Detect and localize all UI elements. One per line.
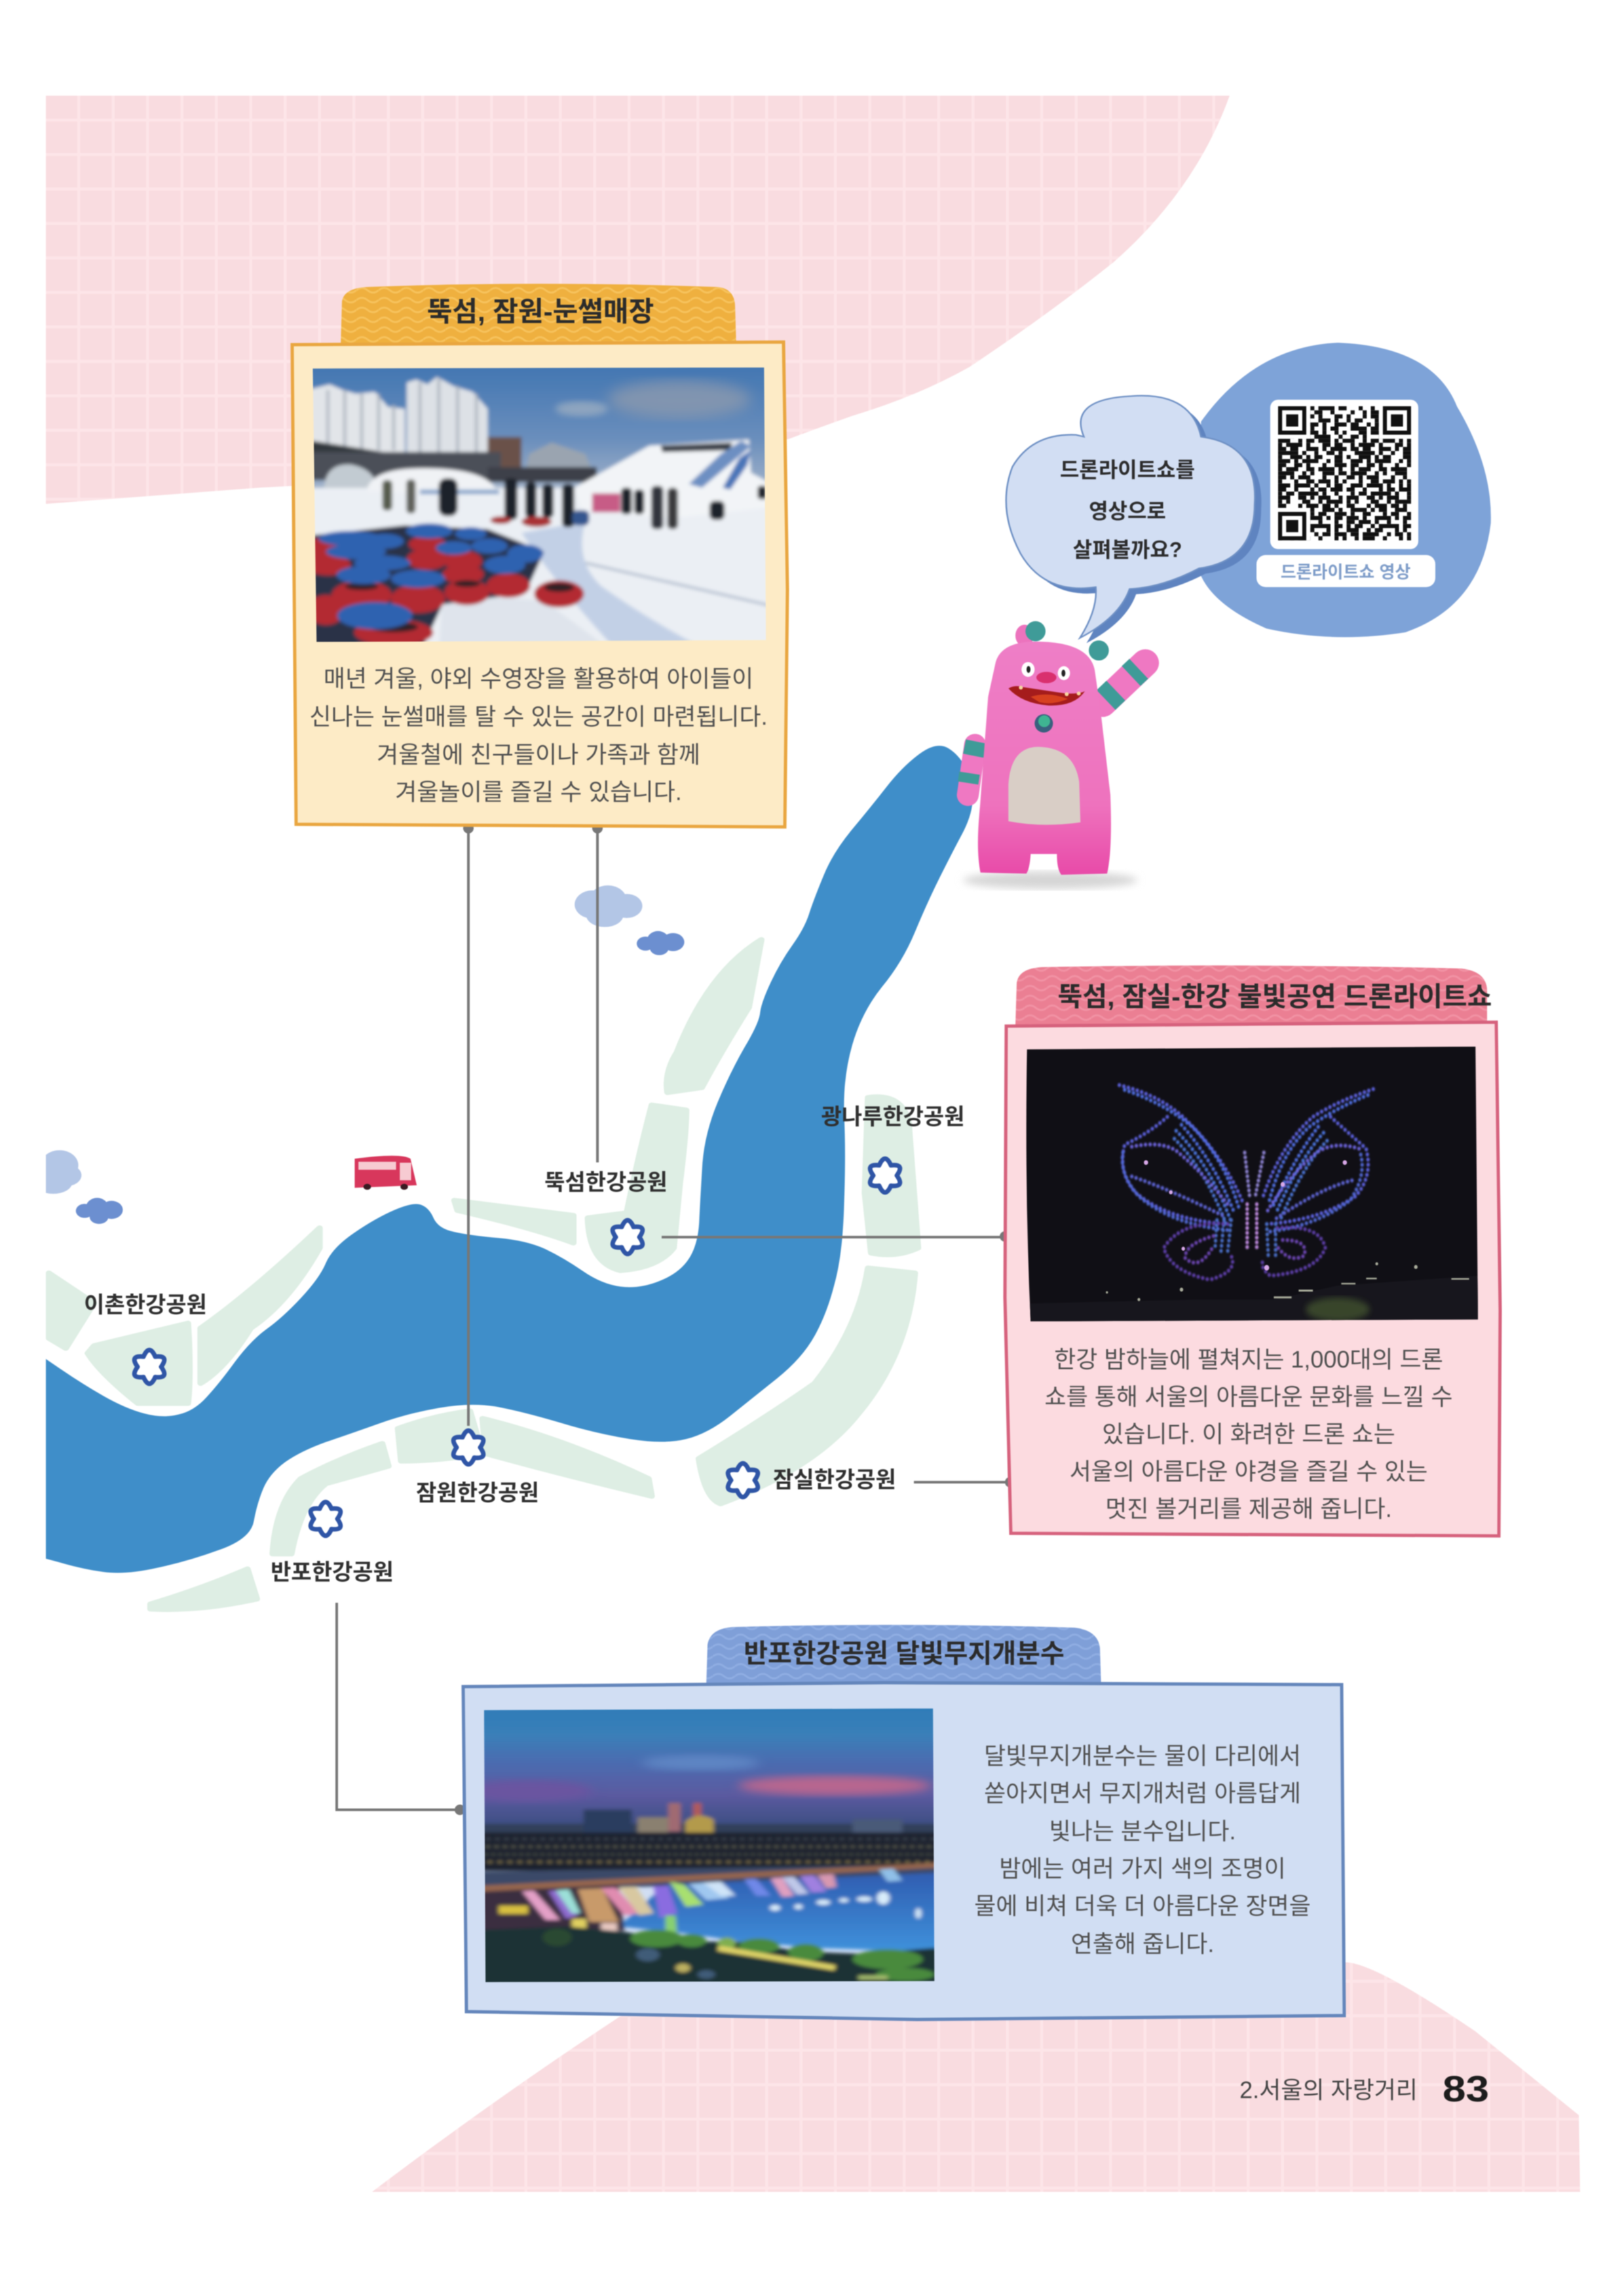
water — [618, 1872, 958, 1953]
bridge — [461, 1862, 958, 1893]
panel box — [292, 342, 787, 827]
text block — [309, 665, 768, 805]
text block: 겨울철에 친구들이나 가족과 함께 — [377, 741, 700, 768]
right arm — [1103, 663, 1145, 703]
panel box — [463, 1683, 1344, 2019]
button — [1034, 714, 1053, 733]
text block: 매년 겨울, 야외 수영장을 활용하여 아이들이 — [324, 665, 753, 692]
connector lines — [337, 828, 1010, 1810]
map: Han river with parks — [35, 746, 973, 1609]
icon: bus — [354, 1156, 417, 1190]
belly — [1008, 747, 1080, 825]
photo: butterfly drones — [1022, 1043, 1483, 1326]
tab — [1015, 965, 1487, 1025]
footer: page number: 83 — [1443, 2068, 1489, 2109]
heading: 뚝섬, 잠실-한강 불빛공연 드론라이트쇼 — [1058, 982, 1492, 1012]
map labels: park names: 뚝섬한강공원 — [544, 1170, 668, 1195]
photo: rainbow bridge at dusk — [461, 1695, 958, 1997]
slide — [574, 436, 765, 491]
heading: 뚝섬, 잠원-눈썰매장 — [427, 296, 654, 327]
text block: 달빛무지개분수는 물이 다리에서 — [984, 1742, 1301, 1769]
speech bubble: 살펴볼까요? — [1073, 538, 1182, 562]
butterfly — [1120, 1085, 1373, 1280]
map labels: park names: 이촌한강공원 — [84, 1293, 207, 1318]
map labels: park names: 광나루한강공원 — [821, 1105, 964, 1130]
text block: 연출해 줍니다. — [1071, 1930, 1214, 1957]
map labels: park names — [84, 1105, 964, 1585]
body — [978, 641, 1111, 875]
speech bubble: 영상으로 — [1089, 499, 1166, 523]
text block: 밤에는 여러 가지 색의 조명이 — [999, 1855, 1286, 1882]
ears — [1015, 624, 1034, 647]
text block — [974, 1742, 1311, 1957]
water glints — [770, 1892, 921, 1919]
map markers: park flowers — [134, 1158, 900, 1536]
tube pile — [314, 523, 542, 643]
map labels: park names: 잠원한강공원 — [416, 1481, 539, 1506]
city lights — [1029, 1276, 1478, 1322]
heading: 반포한강공원 달빛무지개분수 — [744, 1639, 1065, 1668]
shadow on snow — [521, 522, 690, 641]
blue blob behind QR code — [1201, 343, 1491, 637]
mascot: pink monster — [963, 621, 1145, 889]
panel: drone light show — [1005, 965, 1500, 1536]
text block: 신나는 눈썰매를 탈 수 있는 공간이 마련됩니다. — [309, 703, 768, 730]
background: bottom pink grid shape — [372, 1962, 1580, 2192]
text block — [1044, 1346, 1453, 1522]
text block: 겨울놀이를 즐길 수 있습니다. — [395, 778, 682, 805]
map labels: park names: 반포한강공원 — [271, 1560, 394, 1585]
text block: 물에 비쳐 더욱 더 아름다운 장면을 — [974, 1892, 1311, 1919]
clouds — [35, 885, 643, 1194]
speech bubble: 드론라이트쇼를 — [1060, 458, 1195, 482]
tab — [706, 1625, 1101, 1687]
people — [383, 478, 767, 529]
text block: 한강 밤하늘에 펼쳐지는 1,000대의 드론 — [1054, 1346, 1443, 1373]
face — [1021, 662, 1034, 677]
text block: 서울의 아름다운 야경을 즐길 수 있는 — [1070, 1458, 1427, 1485]
text block: 쏟아지면서 무지개처럼 아름답게 — [984, 1780, 1301, 1807]
panel: snow sledding — [292, 284, 787, 827]
left bank under bridge — [461, 1885, 624, 1935]
panel: moonlight rainbow fountain — [461, 1625, 1344, 2019]
map labels: park names: 잠실한강공원 — [773, 1468, 896, 1493]
far water — [461, 1864, 958, 1892]
foreground — [499, 1905, 528, 1914]
fountain colours — [522, 1869, 902, 1922]
panel box — [1005, 1022, 1500, 1536]
QR caption pill: 드론라이트쇼 영상 — [1281, 562, 1410, 582]
text block: 있습니다. 이 화려한 드론 쇼는 — [1102, 1421, 1395, 1447]
text block: 쇼를 통해 서울의 아름다운 문화를 느낄 수 — [1044, 1383, 1453, 1410]
QR caption pill — [1256, 555, 1435, 587]
text block: 빛나는 분수입니다. — [1049, 1818, 1236, 1845]
tab — [341, 284, 736, 347]
park strips — [49, 940, 918, 1609]
background: top pink grid shape — [46, 96, 1230, 504]
river — [37, 746, 973, 1573]
footer: section title: 2.서울의 자랑거리 — [1239, 2076, 1418, 2103]
text block: 멋진 볼거리를 제공해 줍니다. — [1105, 1495, 1392, 1522]
snow ground — [314, 485, 766, 642]
skyline — [461, 1824, 958, 1837]
QR code — [1270, 400, 1418, 549]
left arm — [968, 745, 975, 795]
speech bubble — [1006, 396, 1261, 643]
photo: sledding field — [312, 367, 766, 643]
